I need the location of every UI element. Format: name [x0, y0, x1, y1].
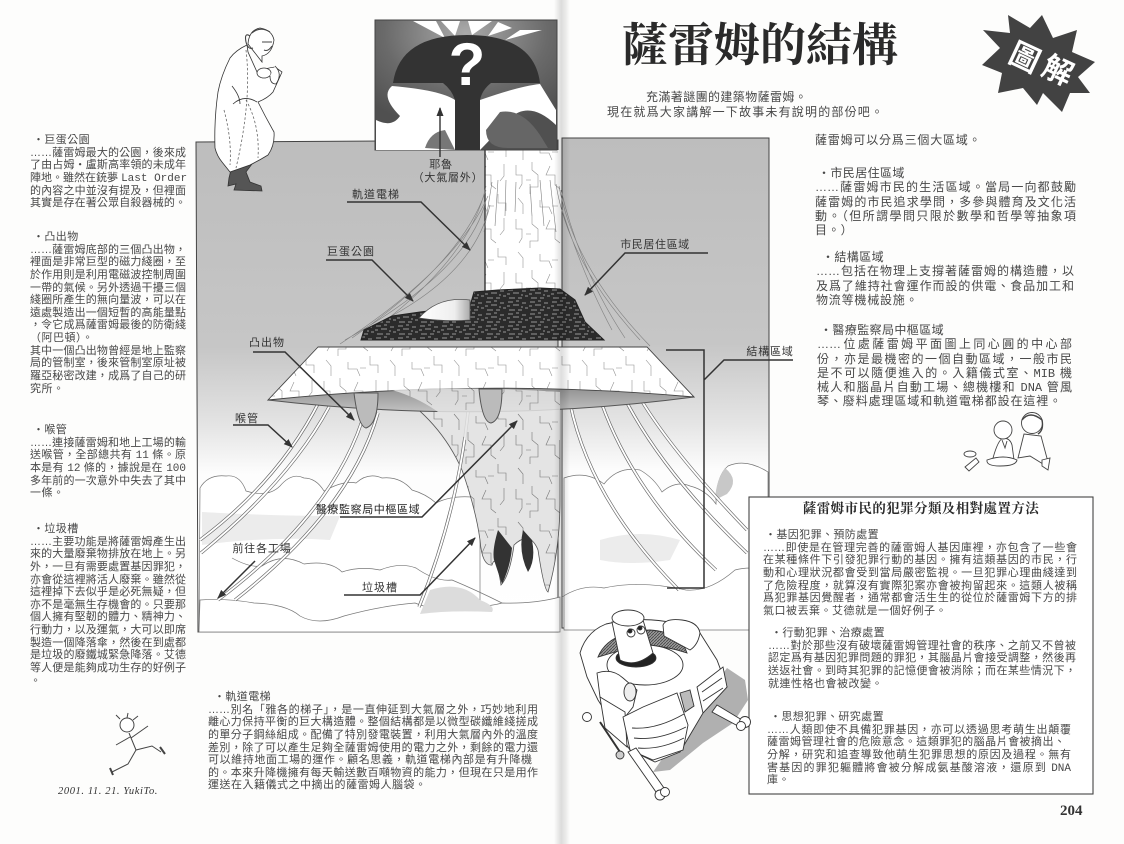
text: orbital elevator: ・軌道電梯 [214, 691, 271, 703]
label: orbital elevator: 軌道電梯 [352, 187, 400, 201]
text: genetic crime: ……即使是在管理完善的薩雷姆人基因庫裡，亦包含了一些會 [763, 542, 1077, 554]
label: Jeru outside atmosphere [413, 108, 483, 184]
text: throat pipes [30, 424, 186, 499]
text: medical supervision hub: 琴、廢料處理區域和軌道電梯都設在這裡。 [817, 394, 1062, 408]
text: garbage chute: 亦會從這裡將活人廢棄。雖然從 [30, 574, 186, 586]
text: protrusions: 遠處製造出一個短暫的高能量點 [30, 307, 186, 319]
text: giant dome park: 的內容之中並沒有提及，但裡面 [30, 185, 186, 197]
text: garbage chute [30, 522, 186, 687]
label: throat pipe: 喉管 [235, 411, 259, 425]
text: thought crime: 害基因的罪犯軀體將會被分解成氨基酸溶液，還原到 DNA [767, 762, 1071, 775]
text: medical supervision hub: 份，亦是最機密的一個自動區域，一般市民 [817, 352, 1072, 366]
label: protrusion [249, 335, 354, 420]
structure disk [268, 347, 694, 440]
text: citizen residential area: ・市民居住區域 [818, 166, 905, 180]
text: three areas intro: 薩雷姆可以分爲三個大區域。 [815, 133, 981, 147]
icon: running child doodle [110, 713, 165, 775]
text: giant dome park: 了由占姆・盧斯高率領的未成年 [30, 159, 186, 171]
text: medical supervision hub: ……位處薩雷姆平面圖上同心圓的中心部 [817, 337, 1072, 351]
panel: right sky [562, 138, 769, 628]
text: structure area: ……包括在物理上支撐著薩雷姆的構造體，以 [816, 264, 1074, 278]
label: protrusion: 凸出物 [249, 335, 285, 349]
protrusion left [354, 393, 378, 428]
structure bracket [666, 350, 793, 588]
text: medical supervision hub: 是不可以隨便進入的。入籍儀式室、MIB 機 [817, 366, 1072, 381]
citizen residential city [361, 288, 604, 340]
text: protrusions: 綫圈所產生的無向量波，可以在 [30, 294, 186, 306]
label: medical supervision hub: 醫療監察局中樞區域 [316, 502, 420, 516]
text: garbage chute: 亦不是毫無生存機會的。只要那 [30, 599, 186, 611]
text: thought crime [767, 710, 1071, 786]
text: structure area: 及爲了維持社會運作而設的供電、食品加工和 [816, 279, 1074, 293]
crime box heading: 薩雷姆市民的犯罪分類及相對處置方法 [803, 501, 1039, 516]
text: garbage chute: 個人擁有堅韌的體力、精神力、 [30, 611, 186, 623]
text: protrusions: ……薩雷姆底部的三個凸出物， [30, 244, 186, 256]
text: medical supervision hub [817, 323, 1072, 408]
icon: star badge 圖解: 圖 [1004, 37, 1045, 80]
gutter shadow [554, 0, 570, 844]
mystery box: Jeru [375, 20, 557, 150]
text: orbital elevator: 離心力保持平衡的巨大構造體。整個結構都是以微型碳纖維綫搓成 [208, 716, 538, 728]
text: garbage chute: 外，一旦有需要處置基因罪犯， [30, 561, 186, 573]
text: garbage chute: 製造一個降落傘，然後在到處都 [30, 637, 186, 649]
text: throat pipes: ……連接薩雷姆和地上工場的輸 [30, 437, 186, 449]
text: citizen residential area: 薩雷姆的市民追求學問，多參與體育及文化活 [815, 195, 1076, 209]
text: structure area: ・結構區域 [822, 250, 884, 264]
label: giant dome park [326, 245, 413, 301]
text: garbage chute: 這裡掉下去似乎是必死無疑，但 [30, 586, 186, 598]
text: action crime: 認定爲有基因犯罪問題的罪犯，其腦晶片會接受調整，然後再 [768, 652, 1076, 664]
text: protrusions [30, 230, 186, 395]
text: orbital elevator: 差別，除了可以產生足夠全薩雷姆使用的電力之外，剩餘的電力還 [208, 742, 538, 754]
text: protrusions: 羅亞秘密改建，成爲了自己的研 [30, 370, 186, 382]
text: protrusions: 於作用則是利用電磁波控制周圍 [30, 269, 186, 281]
signature: 2001. 11. 21. YukiTo. [58, 786, 158, 797]
text: protrusions: ・凸出物 [33, 231, 79, 243]
label: giant dome park: 巨蛋公園 [327, 245, 375, 258]
text: garbage chute: 行動力，以及運氣，大可以即席 [30, 624, 186, 636]
label: orbital elevator [347, 187, 470, 250]
text: thought crime: 庫。 [767, 774, 790, 786]
text: action crime: 送返社會。到時其犯罪的記憶便會被消除；而在某些情況下， [768, 665, 1076, 677]
label: to the factories [218, 541, 292, 598]
lower central cone: medical supervision hub [392, 390, 560, 592]
text: action crime: ……對於那些沒有破壞薩雷姆管理社會的秩序、之前又不曾被 [768, 640, 1076, 652]
text: orbital elevator: 可以維持地面工場的運作。顧名思義，軌道電梯內部是有升降機 [208, 754, 532, 766]
text: protrusions: （阿巴頓）。 [30, 332, 94, 344]
text: throat pipes: 一條。 [30, 487, 64, 499]
giant dome park [419, 299, 470, 321]
icon: two seated children doodle [964, 412, 1050, 471]
text: protrusions: ，令它成爲薩雷姆最後的防衛綫 [30, 319, 186, 331]
panel: left sky [196, 140, 558, 632]
label: Jeru outside atmosphere: （大氣層外） [413, 170, 483, 184]
text: protrusions: 其中一個凸出物曾經是地上監察 [30, 345, 186, 357]
text: structure area [816, 250, 1074, 307]
label: throat pipe [233, 411, 292, 447]
text: orbital elevator: 的單分子鋼絲組成。配備了特別發電裝置，利用大氣層內外的溫度 [208, 729, 538, 741]
text: giant dome park: ・巨蛋公園 [33, 134, 90, 146]
text: throat pipes: 本是有 12 條的，據說是在 100 [30, 462, 186, 475]
text: genetic crime: 爲犯罪基因覺醒者，通常都會活生生的從位於薩雷姆下方的排 [763, 592, 1077, 604]
text: genetic crime: ・基因犯罪、預防處置 [765, 529, 879, 541]
text: thought crime: 薩雷姆管理社會的危險意念。這類罪犯的腦晶片會被摘出、 [767, 736, 1065, 748]
text: medical supervision hub: ・醫療監察局中樞區域 [820, 323, 944, 337]
text: thought crime: ……人類即使不具備犯罪基因，亦可以透過思考萌生出顛覆 [767, 724, 1071, 736]
text: garbage chute: 來的大量廢棄物排放在地上。另 [30, 548, 186, 560]
text: giant dome park: 陣地。雖然在銃夢 Last Order [30, 172, 187, 185]
text: thought crime: ・思想犯罪、研究處置 [770, 711, 884, 723]
text: citizen residential area: 動。（但所謂學問只限於數學和哲學等抽象項 [815, 209, 1076, 223]
text: garbage chute: 。 [30, 675, 42, 687]
label: garbage chute: 垃圾槽 [362, 580, 398, 594]
question mark: ? [449, 31, 485, 98]
text: protrusions: 一帶的氣候。另外透過干擾三個 [30, 282, 186, 294]
protrusion middle [479, 389, 502, 423]
text: throat pipes: 多年前的一次意外中失去了其中 [30, 475, 186, 487]
page number: 204 [1060, 803, 1082, 819]
label: garbage chute [344, 538, 475, 595]
text: garbage chute: ・垃圾槽 [33, 523, 79, 535]
text: garbage chute: ……主要功能是將薩雷姆產生出 [30, 536, 186, 548]
text: giant dome park [30, 134, 187, 209]
text: throat pipes: 送喉管，全部總共有 11 條。原 [30, 449, 186, 462]
text: protrusions: 究所。 [30, 383, 64, 395]
icon: Salem robot [580, 610, 750, 800]
label: to the factories: 前往各工場 [232, 541, 292, 555]
label: citizen residential area [585, 237, 708, 295]
label: Jeru outside atmosphere: 耶魯 [429, 157, 453, 171]
text: thought crime: 分解，研究和追查導致他萌生犯罪思想的原因及過程。無有 [767, 749, 1071, 761]
text: genetic crime: 了危險程度，就算沒有實際犯案亦會被拘留起來。這類人被稱 [763, 580, 1077, 592]
text: genetic crime: 在某種條件下引發犯罪行動的基因。擁有這類基因的市民，行 [763, 554, 1077, 566]
icon: star badge 圖解: 解 [1037, 50, 1078, 93]
text: orbital elevator [208, 690, 538, 791]
text: citizen residential area [815, 166, 1076, 237]
text: genetic crime [763, 528, 1077, 617]
text: protrusions: 裡面是非常巨型的磁力綫圈，至 [30, 256, 186, 268]
text: orbital elevator: 的。本來升降機擁有每天輸送數百噸物資的能力，但現在只是用作 [208, 767, 538, 779]
label: medical supervision hub [316, 421, 517, 517]
text: protrusions: 局的管制室，後來管制室原址被 [30, 357, 186, 369]
clouds [199, 463, 768, 632]
text: throat pipes: ・喉管 [33, 424, 67, 436]
icon: old man in long coat [215, 28, 282, 191]
crime classification panel box [749, 497, 1093, 794]
text: garbage chute: 是垃圾的廢鐵城緊急降落。艾德 [30, 649, 186, 661]
tubes: throat pipes [200, 390, 747, 607]
text: action crime: ・行動犯罪、治療處置 [771, 627, 885, 639]
text: orbital elevator: 運送在入籍儀式之中摘出的薩雷姆人腦袋。 [208, 779, 426, 791]
text: giant dome park: 其實是存在著公眾自殺器械的。 [30, 197, 186, 209]
intro text: 充滿著謎團的建築物薩雷姆。 [646, 90, 807, 104]
text: action crime: 就連性格也會被改變。 [768, 678, 883, 690]
garbage chute openings [494, 530, 533, 584]
text: citizen residential area: 目。） [815, 223, 853, 237]
text: giant dome park: ……薩雷姆最大的公園，後來成 [30, 147, 186, 159]
text: genetic crime: 氣口被丟棄。艾德就是一個好例子。 [763, 605, 947, 617]
text: medical supervision hub: 械人和腦晶片自動工場、總機樓和 DNA 管風 [817, 380, 1072, 395]
text: citizen residential area: ……薩雷姆市民的生活區域。當局一向都鼓勵 [815, 180, 1076, 194]
intro text [607, 90, 884, 119]
text: genetic crime: 動和心理狀況都會受到當局嚴密監視。一旦犯罪心理曲綫達到 [763, 567, 1077, 579]
label: citizen residential area: 市民居住區域 [620, 237, 690, 251]
text: garbage chute: 等人便是能夠成功生存的好例子 [30, 662, 186, 674]
orbital elevator tower [340, 150, 650, 346]
intro text: 現在就爲大家講解一下故事未有說明的部份吧。 [607, 105, 884, 119]
text: structure area: 物流等機械設施。 [816, 293, 918, 307]
label: structure area: 結構區域 [746, 344, 794, 358]
text: orbital elevator: ……別名「雅各的梯子」，是一直伸延到大氣層之外，巧妙地利用 [208, 704, 538, 716]
text: action crime [768, 626, 1076, 690]
title: 薩雷姆的結構 [622, 20, 898, 71]
